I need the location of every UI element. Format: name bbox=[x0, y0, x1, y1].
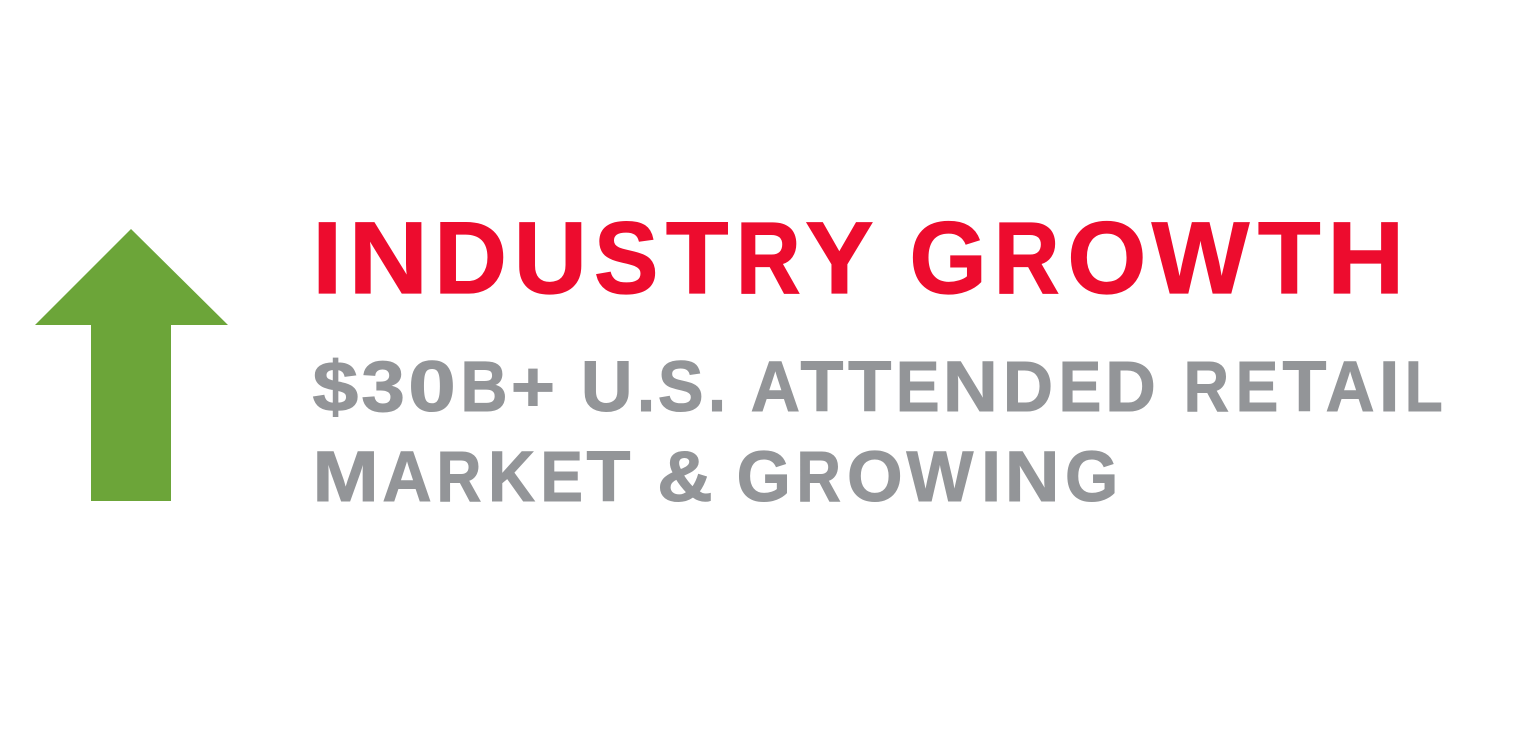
subtitle line 2: I bbox=[981, 437, 1001, 517]
subtitle line 2: W bbox=[907, 438, 974, 517]
title: H bbox=[1327, 201, 1404, 315]
title: R bbox=[994, 200, 1060, 315]
icon: green up arrow bbox=[35, 229, 228, 501]
subtitle line 2: R bbox=[796, 438, 841, 517]
subtitle line 1: E bbox=[896, 346, 940, 427]
subtitle line 2: A bbox=[382, 437, 432, 516]
title: I bbox=[312, 201, 342, 315]
subtitle line 1: N bbox=[943, 346, 998, 426]
subtitle line 1: 3 bbox=[361, 346, 405, 426]
subtitle line 1: E bbox=[1236, 348, 1278, 427]
title: D bbox=[434, 201, 507, 315]
title: G bbox=[909, 202, 987, 315]
subtitle line 2: G bbox=[1065, 437, 1118, 516]
subtitle line 2: T bbox=[586, 437, 630, 517]
title: N bbox=[348, 201, 428, 315]
title: S bbox=[594, 202, 658, 316]
subtitle line 1: U bbox=[581, 347, 633, 427]
subtitle line 1: I bbox=[1379, 347, 1400, 427]
subtitle line 2 bbox=[313, 436, 1118, 517]
title: U bbox=[514, 201, 587, 315]
subtitle line 1: + bbox=[511, 346, 555, 427]
subtitle line 1 bbox=[313, 346, 1443, 427]
subtitle line 1: B bbox=[461, 347, 508, 427]
subtitle line 2: K bbox=[488, 437, 535, 517]
subtitle line 1: D bbox=[1105, 346, 1156, 426]
subtitle line 1: R bbox=[1184, 347, 1229, 427]
subtitle line 1: T bbox=[801, 347, 843, 427]
subtitle line 1: D bbox=[1003, 346, 1053, 426]
title: T bbox=[666, 200, 728, 315]
title: R bbox=[736, 202, 801, 315]
subtitle line 1: L bbox=[1405, 347, 1443, 427]
subtitle line 2: M bbox=[313, 438, 379, 517]
subtitle line 1: 0 bbox=[408, 347, 456, 426]
subtitle line 1: A bbox=[1326, 346, 1375, 426]
subtitle line 2: E bbox=[540, 438, 583, 517]
subtitle line 2: & bbox=[657, 436, 713, 516]
subtitle line 1: A bbox=[751, 347, 800, 426]
subtitle line 1: S bbox=[658, 347, 704, 426]
title: O bbox=[1067, 201, 1146, 315]
subtitle line 2: N bbox=[1005, 436, 1060, 517]
subtitle line 1: T bbox=[848, 348, 891, 427]
subtitle line 1: T bbox=[1282, 347, 1326, 427]
subtitle line 2: G bbox=[737, 436, 791, 516]
title: Y bbox=[805, 201, 873, 315]
title bbox=[312, 200, 1404, 316]
subtitle line 1: . bbox=[637, 347, 655, 427]
title: W bbox=[1152, 201, 1249, 315]
title: T bbox=[1258, 200, 1321, 315]
subtitle line 1: . bbox=[708, 347, 726, 427]
subtitle line 1: E bbox=[1059, 348, 1101, 427]
subtitle line 2: R bbox=[437, 437, 481, 517]
subtitle line 2: O bbox=[847, 437, 903, 517]
subtitle line 1: $ bbox=[313, 347, 358, 427]
